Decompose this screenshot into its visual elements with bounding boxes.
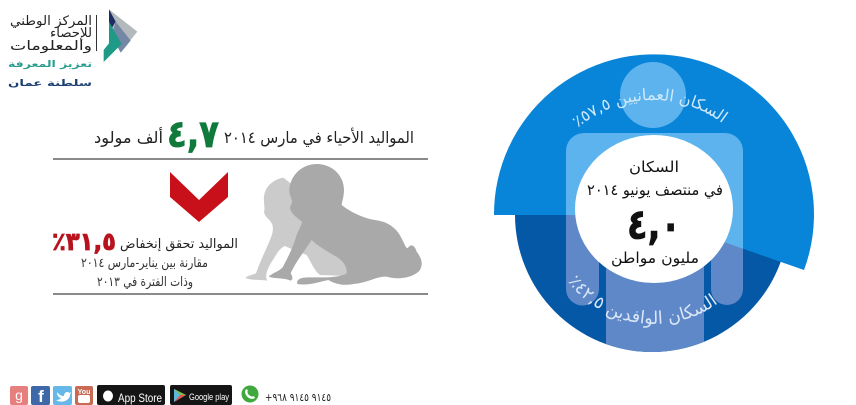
expatriate segment <box>515 78 789 352</box>
omani segment <box>494 54 814 270</box>
icon: google plus: g <box>15 387 23 403</box>
heading text: live births: المواليد الأحياء في مارس ٢٠١٤ <box>224 127 414 148</box>
decline label: المواليد تحقق إنخفاض <box>120 237 238 252</box>
icon: crawling babies <box>245 164 422 285</box>
person head <box>620 62 686 128</box>
logo divider <box>96 15 97 51</box>
logo name text <box>10 14 92 54</box>
decline percentage: ٣١,٥٪ <box>52 227 116 256</box>
population circle chart <box>494 54 814 352</box>
white centre <box>575 135 733 283</box>
logo country: سلطنة عمان <box>8 79 92 89</box>
comparison line one: مقارنة بين يناير-مارس ٢٠١٤ <box>81 256 208 271</box>
logo slogan: تعزيز المعرفة <box>8 60 92 70</box>
icon: twitter <box>53 386 72 405</box>
icon: google plus <box>10 386 28 405</box>
icon: youtube: You <box>78 389 90 396</box>
badge: google play <box>170 385 232 405</box>
person figure, upper <box>566 133 743 249</box>
centre date: في منتصف يونيو ٢٠١٤ <box>587 181 723 200</box>
centre unit: مليون مواطن <box>611 249 699 267</box>
comparison line two: وذات الفترة في ٢٠١٣ <box>97 275 193 290</box>
front baby silhouette <box>269 164 422 285</box>
births decline text <box>52 227 238 290</box>
births heading <box>94 112 414 156</box>
person figure, lower <box>566 215 743 355</box>
logo name text: والمعلومات <box>10 39 92 54</box>
centre title: السكان <box>629 158 679 176</box>
phone number: +٩٦٨ ٩١٤٥ ٩١٤٥ <box>265 391 331 404</box>
icon: youtube <box>75 386 93 405</box>
back baby silhouette <box>245 178 348 281</box>
heading unit: ألف مولود <box>94 127 163 148</box>
centre value: ٤,٠ <box>627 200 681 249</box>
badge: app store: App Store <box>118 393 162 405</box>
badge: google play: Google play <box>189 392 229 403</box>
logo name text: المركز الوطني <box>10 14 92 29</box>
footer social and contact <box>10 385 331 405</box>
badge: app store <box>97 385 165 405</box>
heading number: ٤,٧ <box>167 112 219 156</box>
icon: facebook <box>31 386 50 405</box>
logo: National Centre for Statistics and Information <box>8 9 137 89</box>
logo mark <box>104 9 137 62</box>
icon: whatsapp <box>242 386 258 402</box>
expatriate population curved label: السكان الوافدين ٤٢,٥٪ <box>568 275 717 328</box>
icon: red down chevron <box>170 172 228 222</box>
omani population curved label: السكان العمانيين ٥٧,٥٪ <box>572 88 728 128</box>
logo name text: للإحصاء <box>50 26 92 41</box>
